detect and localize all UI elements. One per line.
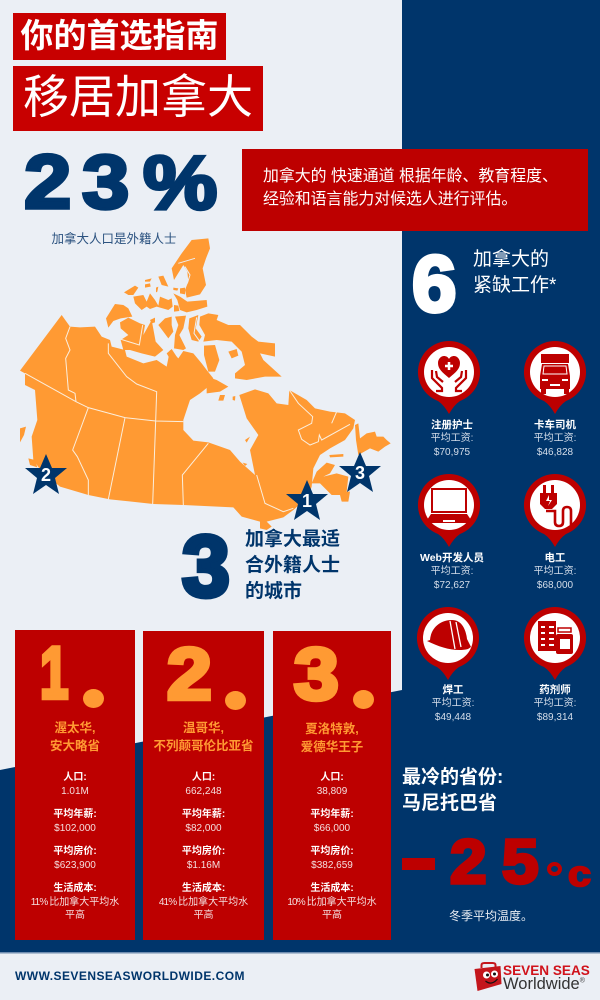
stat: population: 1.01M	[61, 786, 89, 797]
stat: population: 人口:	[192, 772, 215, 783]
stat: population: 662,248	[185, 786, 222, 797]
stat: salary	[53, 808, 97, 834]
city name: 不列颠哥伦比亚省	[153, 739, 254, 753]
rank 3	[293, 634, 374, 715]
stat: cost of living: 生活成本:	[53, 883, 97, 894]
job: web developer: 平均工资:	[431, 566, 473, 577]
footer logo	[474, 962, 590, 993]
stat: population	[185, 772, 222, 797]
map star 2	[25, 454, 67, 494]
stat: home price: $623,900	[54, 860, 96, 871]
digit 2: 2	[450, 828, 487, 897]
rank 1: 1	[40, 633, 68, 714]
city name: 夏洛特敦,	[305, 722, 359, 736]
stat: home price: $1.16M	[187, 860, 220, 871]
job: welder	[416, 607, 480, 723]
job: welder: 平均工资:	[432, 698, 474, 709]
stat: salary: 平均年薪:	[53, 809, 97, 820]
stat: cost of living: 11% 比加拿大平均水	[31, 897, 119, 908]
panel: city 3 Charlottetown	[273, 631, 391, 940]
map star 1: 1	[302, 491, 312, 511]
panel: city 2 Vancouver	[143, 631, 264, 940]
heading: coldest province: 最冷的省份:	[402, 767, 503, 788]
rank 2	[167, 634, 246, 715]
stat: home price	[310, 845, 354, 871]
icon: laptop pin	[418, 474, 480, 547]
stat: 23 percent: 2	[24, 140, 71, 225]
stat: salary: $102,000	[54, 823, 96, 834]
job: welder: $49,448	[435, 712, 471, 723]
digit 5: 5	[502, 828, 539, 897]
heading: three best cities	[245, 528, 340, 602]
stat: population	[317, 772, 347, 797]
job: pharmacist	[524, 607, 586, 723]
job: nurse: 注册护士	[431, 419, 473, 431]
job: electrician: $68,000	[537, 580, 573, 591]
map star 3	[339, 452, 381, 492]
mainland	[20, 315, 355, 530]
stat: 23 percent: %	[143, 141, 217, 226]
stat: cost of living: 10% 比加拿大平均水	[287, 897, 377, 908]
heading: guide: 你的首选指南	[20, 17, 218, 54]
heading: three best cities: 加拿大最适	[245, 529, 340, 550]
panel: city 1 Ottawa	[15, 630, 135, 940]
job: web developer	[418, 474, 484, 591]
stat: home price	[53, 845, 97, 871]
big number 3: 3	[182, 519, 230, 615]
job: electrician: 平均工资:	[534, 566, 576, 577]
stat: population	[61, 772, 89, 797]
stat: home price: $382,659	[311, 860, 353, 871]
job: pharmacist: 平均工资:	[534, 698, 576, 709]
logo text: Worldwide®	[503, 975, 585, 993]
stat: cost of living: 41% 比加拿大平均水	[159, 897, 248, 908]
stat: population: 人口:	[320, 772, 344, 783]
job: truck driver	[524, 341, 586, 458]
stat: salary: $66,000	[314, 823, 350, 834]
job: pharmacist: $89,314	[537, 712, 573, 723]
map star 3: 3	[355, 463, 365, 483]
city name	[301, 722, 363, 754]
job: truck driver: $46,828	[537, 447, 573, 458]
heading: three best cities: 的城市	[245, 581, 302, 602]
stat: salary	[310, 808, 354, 834]
stat: home price: 平均房价:	[310, 846, 354, 857]
callout: express entry: 经验和语言能力对候选人进行评估。	[263, 191, 517, 208]
city name: 爱德华王子	[301, 740, 363, 754]
job: nurse: $70,975	[434, 447, 470, 458]
stat: home price: 平均房价:	[182, 846, 225, 857]
icon: plug pin	[524, 474, 586, 547]
map star 2: 2	[41, 465, 51, 485]
stat: cost of living: 生活成本:	[182, 883, 225, 894]
stat: salary: $82,000	[185, 823, 222, 834]
unit c: c	[568, 853, 591, 894]
minus sign	[402, 858, 435, 870]
stat caption: 加拿大人口是外籍人士	[51, 232, 176, 246]
heading: move to Canada: 移居加拿大	[23, 71, 253, 123]
job: truck driver: 卡车司机	[534, 419, 576, 431]
icon: hard hat pin	[416, 607, 480, 680]
stat: salary: 平均年薪:	[310, 809, 354, 820]
city name: 安大略省	[50, 739, 100, 753]
map of Canada	[20, 238, 391, 530]
stat: 23 percent: 3	[82, 140, 129, 225]
job: truck driver: 平均工资:	[534, 433, 576, 444]
city name: 渥太华,	[54, 721, 95, 735]
icon: truck pin	[524, 341, 586, 414]
heading: six jobs	[473, 248, 556, 296]
icon: nurse pin	[418, 341, 480, 414]
stat: minus 25 degrees	[402, 828, 592, 897]
callout: express entry	[242, 149, 588, 231]
heading: six jobs: 紧缺工作*	[473, 275, 556, 296]
job: nurse: 平均工资:	[431, 433, 473, 444]
heading: coldest province	[402, 766, 503, 814]
big number 6: 6	[412, 239, 456, 328]
temperature caption: 冬季平均温度。	[449, 909, 533, 923]
heading: coldest province: 马尼托巴省	[402, 793, 497, 814]
job: pharmacist: 药剂师	[539, 684, 571, 696]
callout: express entry: 加拿大的 快速通道 根据年龄、教育程度、	[263, 168, 558, 185]
stat: cost of living	[159, 882, 248, 921]
logo text: SEVEN SEAS	[503, 963, 590, 978]
stat: cost of living: 生活成本:	[310, 883, 354, 894]
stat: cost of living: 平高	[194, 910, 214, 921]
job: welder: 焊工	[442, 684, 464, 696]
job: electrician	[524, 474, 586, 591]
stat: salary	[182, 808, 225, 834]
degree ring	[547, 862, 562, 876]
stat: population: 人口:	[63, 772, 87, 783]
job: web developer: Web开发人员	[420, 552, 484, 564]
stat: home price: 平均房价:	[53, 846, 97, 857]
map star 1	[286, 480, 328, 520]
icon: suitcase mascot	[472, 962, 503, 992]
heading: three best cities: 合外籍人士	[245, 555, 340, 576]
stat: home price	[182, 845, 225, 871]
city name	[50, 721, 100, 753]
stat: population: 38,809	[317, 786, 347, 797]
job: nurse	[418, 341, 480, 458]
job: web developer: $72,627	[434, 580, 470, 591]
stat: cost of living: 平高	[65, 910, 85, 921]
stat: 23 percent	[24, 140, 218, 226]
stat: cost of living	[287, 882, 377, 921]
city name	[153, 721, 254, 753]
rank 2: 2	[167, 634, 212, 715]
icon: pills pin	[524, 607, 586, 680]
stat: cost of living: 平高	[322, 910, 342, 921]
footer website: WWW.SEVENSEASWORLDWIDE.COM	[15, 969, 245, 983]
rank 3: 3	[294, 634, 339, 715]
rank 1	[40, 633, 104, 714]
heading: six jobs: 加拿大的	[473, 249, 549, 270]
city name: 温哥华,	[183, 721, 224, 735]
stat: salary: 平均年薪:	[182, 809, 225, 820]
job: electrician: 电工	[544, 552, 566, 564]
stat: cost of living	[31, 882, 119, 921]
